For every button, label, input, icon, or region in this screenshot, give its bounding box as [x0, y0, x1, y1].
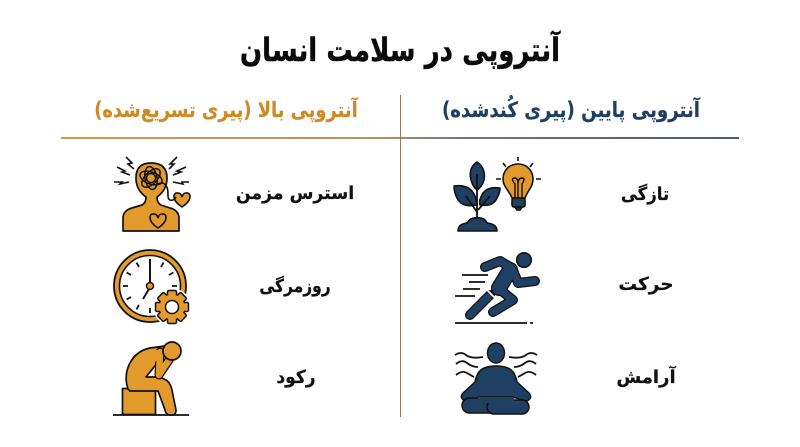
- heading: high entropy: آنتروپی بالا (پیری تسریع‌شده): [94, 98, 358, 122]
- horizontal header divider: [61, 137, 739, 139]
- panel: low entropy (slowed aging): [442, 94, 700, 415]
- vertical column divider: [400, 95, 401, 417]
- label: routine: روزمرگی: [259, 276, 331, 297]
- icon: clock with gear: [113, 249, 190, 324]
- label: movement: حرکت: [618, 274, 674, 295]
- icon: running person: [455, 252, 540, 324]
- label: freshness: تازگی: [621, 184, 669, 205]
- label: chronic stress: استرس مزمن: [236, 183, 354, 204]
- panel: high entropy (accelerated aging): [94, 96, 358, 416]
- heading: low entropy: آنتروپی پایین (پیری کُندشده): [442, 98, 700, 122]
- icon: despondent seated person: [113, 341, 189, 416]
- label: stagnation: رکود: [276, 367, 316, 388]
- icon: plant and light bulb: [453, 157, 541, 232]
- label: calm: آرامش: [616, 367, 676, 388]
- icon: stressed person with tangled mind: [114, 156, 191, 232]
- icon: meditating person: [454, 342, 538, 415]
- title: آنتروپی در سلامت انسان: [240, 31, 560, 69]
